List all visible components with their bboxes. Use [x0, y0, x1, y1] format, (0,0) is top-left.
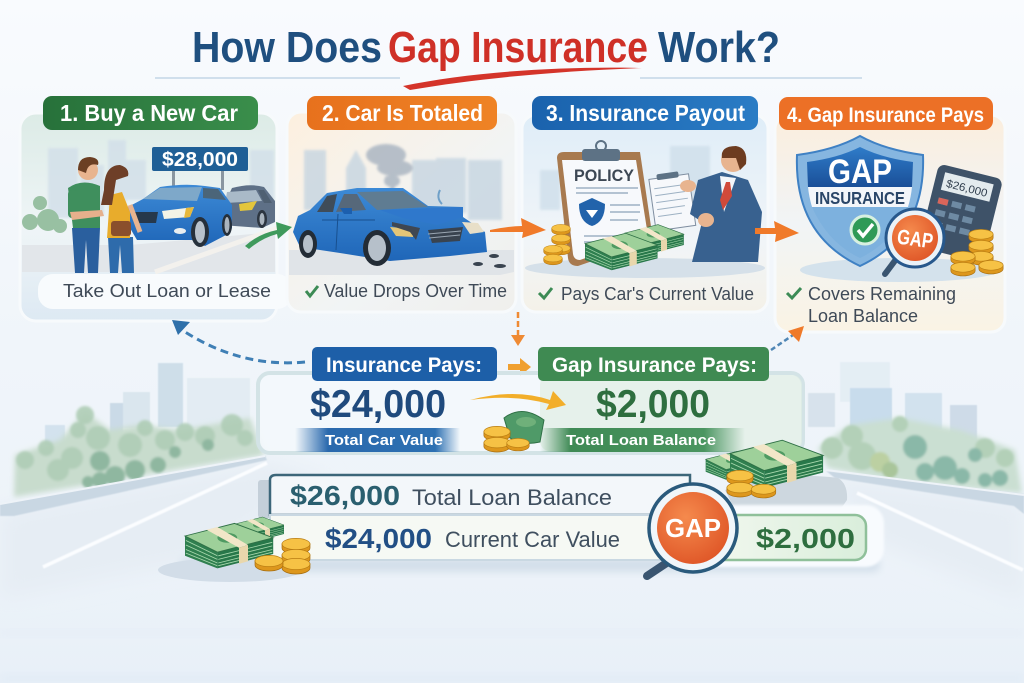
policy clipboard	[557, 141, 653, 266]
cash and coins left	[158, 517, 310, 582]
skyline left	[45, 363, 250, 447]
calculator: $26,000	[945, 178, 989, 200]
caption pill	[38, 274, 292, 309]
coins and cash	[484, 411, 544, 452]
gap result bar: $2,000	[756, 523, 855, 554]
bush	[22, 196, 67, 233]
insurance amount: $24,000	[310, 383, 446, 426]
gap magnifier	[885, 209, 944, 274]
header: 3. Insurance Payout	[546, 100, 745, 126]
cash stacks	[585, 225, 684, 270]
price sign: $28,000	[162, 149, 238, 171]
caption	[787, 284, 956, 326]
caption: Loan Balance	[808, 306, 918, 326]
header: 1. Buy a New Car	[60, 100, 238, 126]
gap insurance shield	[797, 136, 923, 266]
arrow: small orange between labels	[508, 358, 531, 376]
loan balance bar: Total Loan Balance	[412, 485, 612, 510]
gap insurance pays label: Gap Insurance Pays:	[552, 354, 757, 377]
total loan balance band: Total Loan Balance	[566, 432, 716, 449]
small shield icon	[579, 198, 605, 226]
header	[43, 96, 258, 130]
panel 3: insurance payout	[522, 96, 768, 312]
middle panel: payouts	[258, 347, 803, 453]
skyline right	[808, 362, 977, 443]
title: Work?	[658, 23, 780, 72]
insurance pays label: Insurance Pays:	[326, 354, 482, 377]
price sign	[152, 147, 248, 190]
gap magnifier large	[647, 484, 737, 576]
gap result bar	[680, 505, 884, 567]
loan balance bar	[258, 475, 690, 518]
calculator	[918, 164, 1003, 263]
yellow arrow	[470, 391, 566, 410]
arrow: dashed orange down	[511, 312, 525, 346]
caption: Pays Car's Current Value	[561, 284, 754, 304]
title: How Does	[192, 23, 382, 72]
header: 2. Car Is Totaled	[322, 100, 483, 126]
arrow: orange, step 3 to 4	[755, 221, 799, 242]
caption: Covers Remaining	[808, 284, 956, 304]
total car value band: Total Car Value	[325, 432, 443, 449]
arrow: dashed to step 4	[771, 326, 804, 350]
trees right	[818, 416, 1022, 493]
coins	[544, 224, 570, 265]
caption pill: Take Out Loan or Lease	[63, 281, 271, 301]
road guard rails	[0, 456, 1024, 516]
skyline scene	[48, 140, 274, 218]
arrow: orange, step 2 to 3	[490, 218, 546, 238]
people: couple	[68, 157, 140, 273]
cash pile right	[706, 440, 847, 510]
arrow: green, step 1 to 2	[245, 222, 292, 249]
title underline swoosh	[403, 68, 642, 90]
gap insurance pays label	[538, 347, 769, 381]
header: 4. Gap Insurance Pays	[787, 104, 984, 127]
title: Gap Insurance	[388, 23, 648, 72]
current car value bar: Current Car Value	[445, 527, 620, 552]
current car value bar	[180, 515, 880, 572]
trees left	[14, 406, 264, 497]
insurance pays label	[312, 347, 497, 381]
gap insurance shield: GAP	[828, 153, 892, 191]
businessman	[680, 146, 762, 262]
coins	[951, 229, 1003, 276]
check badge	[851, 216, 879, 244]
smoke	[366, 144, 413, 198]
arrow: dashed blue back to step 1	[172, 320, 305, 363]
total car value band	[295, 428, 460, 452]
current car value bar: $24,000	[325, 523, 432, 554]
caption: Value Drops Over Time	[324, 281, 507, 301]
wrecked blue car	[293, 188, 506, 268]
total loan balance band	[540, 428, 745, 452]
panel 2: car is totaled	[287, 96, 516, 312]
blue car	[128, 185, 232, 247]
gap magnifier: GAP	[896, 226, 934, 253]
grey car	[221, 185, 275, 228]
panel 1: buy a new car	[20, 96, 292, 321]
panel 4: gap insurance pays	[775, 97, 1005, 332]
title	[155, 23, 862, 90]
gap magnifier large: GAP	[665, 513, 721, 543]
loan balance bar: $26,000	[290, 480, 400, 511]
header	[779, 97, 993, 130]
policy clipboard: POLICY	[574, 166, 635, 185]
gap insurance shield: INSURANCE	[815, 188, 905, 208]
gap amount: $2,000	[596, 383, 710, 426]
small document	[648, 170, 696, 231]
